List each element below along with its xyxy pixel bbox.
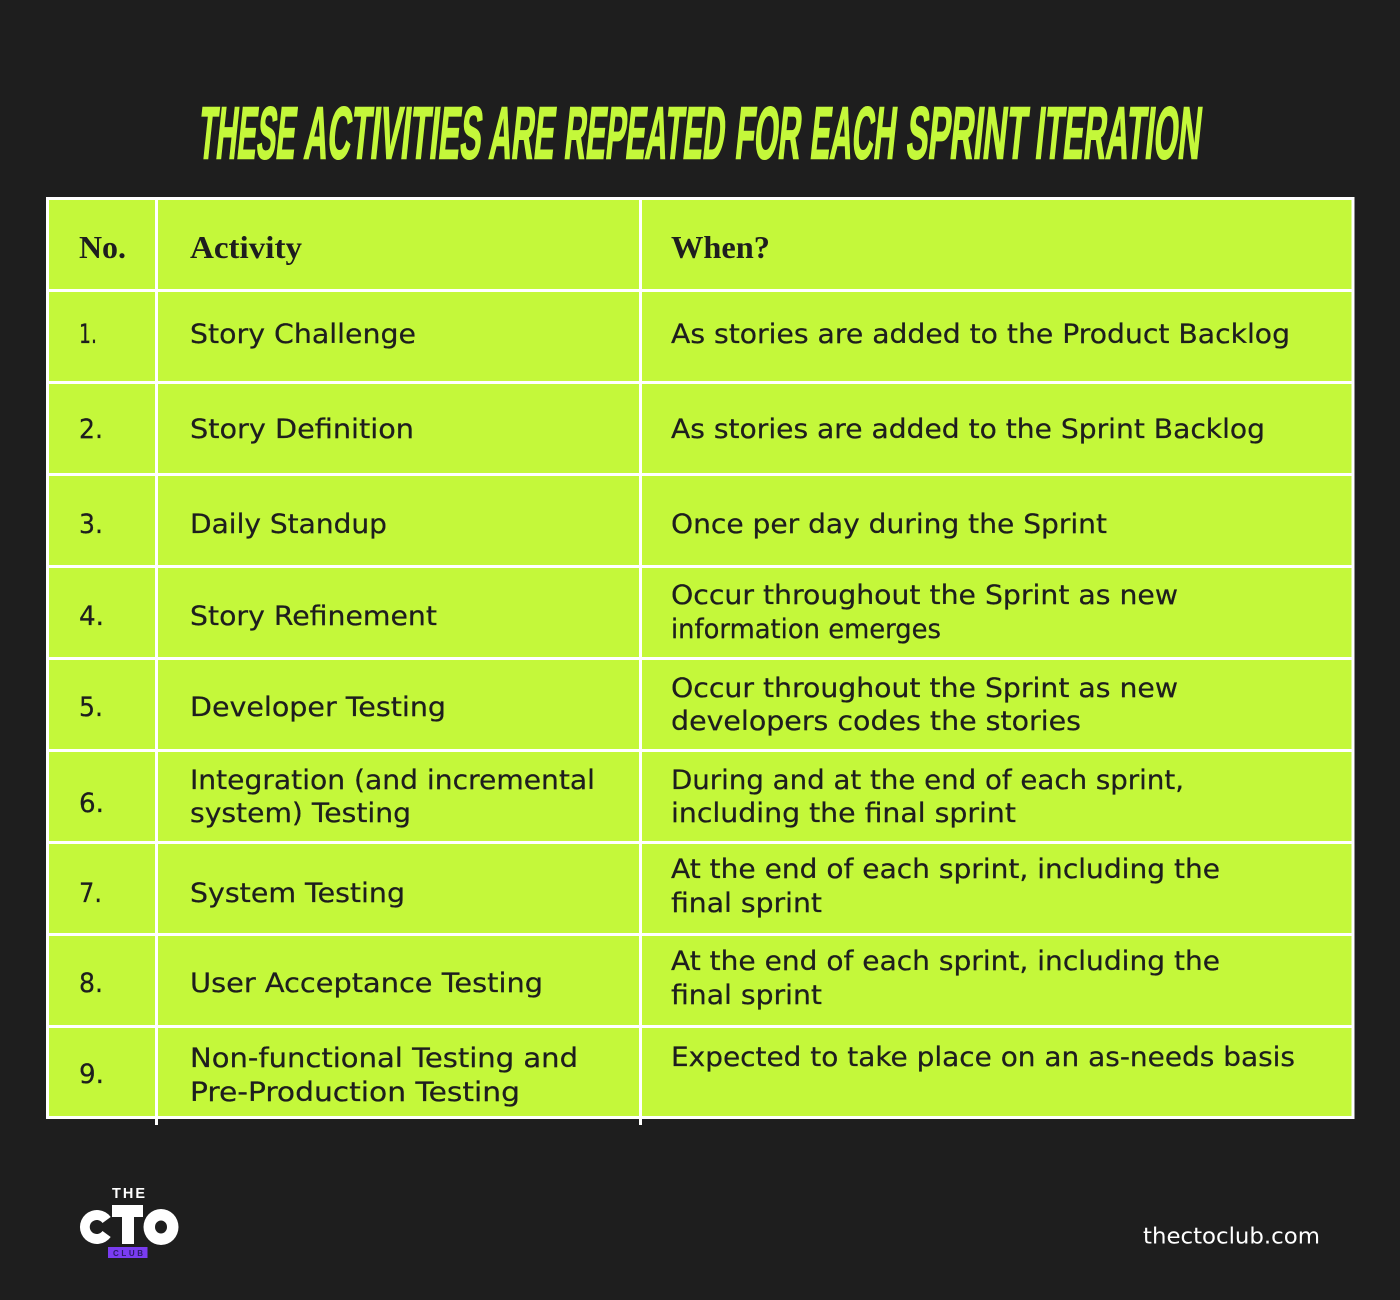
row 7 xyxy=(79,854,1220,919)
row 8: 8. xyxy=(79,968,103,999)
table background xyxy=(48,198,1353,1118)
row 7: 7. xyxy=(79,878,102,909)
title: THESE xyxy=(195,92,301,174)
title: ARE xyxy=(486,92,560,174)
row 3 xyxy=(79,509,1107,540)
row 6: 6. xyxy=(79,788,104,819)
row 5: Developer Testing xyxy=(190,692,446,723)
header row: No. xyxy=(79,229,126,265)
logo club badge xyxy=(108,1247,148,1258)
row 4: information emerges xyxy=(671,614,941,645)
title xyxy=(195,92,1206,174)
row 6: system) Testing xyxy=(190,798,411,829)
row 7: System Testing xyxy=(190,878,405,909)
header row: When? xyxy=(671,229,770,265)
row 5: 5. xyxy=(79,692,103,723)
title: FOR xyxy=(732,92,806,174)
logo letter C xyxy=(80,1210,111,1244)
row 8 xyxy=(79,946,1220,1011)
row 4: Story Refinement xyxy=(190,601,437,632)
logo letter T xyxy=(112,1205,143,1244)
row 1: Story Challenge xyxy=(190,319,416,350)
row 6: During and at the end of each sprint, xyxy=(671,765,1184,796)
row 4: 4. xyxy=(79,601,104,632)
title: ACTIVITIES xyxy=(301,92,487,174)
logo: The CTO Club: THE xyxy=(112,1186,145,1202)
row 5: Occur throughout the Sprint as new xyxy=(671,673,1178,704)
row 9 xyxy=(79,1042,1295,1108)
title: REPEATED xyxy=(561,92,730,174)
row 7: final sprint xyxy=(671,888,822,919)
row 2: 2. xyxy=(79,414,103,445)
row 8: final sprint xyxy=(671,980,822,1011)
row 4: Occur throughout the Sprint as new xyxy=(671,580,1178,611)
row 6: including the final sprint xyxy=(671,798,1016,829)
row 7: At the end of each sprint, including the xyxy=(671,854,1220,885)
row 1 xyxy=(79,319,1290,350)
row 1: As stories are added to the Product Backlog xyxy=(671,319,1290,350)
row 6: Integration (and incremental xyxy=(190,765,595,796)
row 4 xyxy=(79,580,1178,645)
row 3: 3. xyxy=(79,509,103,540)
header row: Activity xyxy=(190,229,302,265)
row 9: Expected to take place on an as-needs basis xyxy=(671,1042,1295,1073)
table xyxy=(47,198,1353,1125)
row 8: User Acceptance Testing xyxy=(190,968,543,999)
logo letter O xyxy=(144,1209,178,1245)
website url: thectoclub.com xyxy=(1143,1224,1320,1250)
title: SPRINT xyxy=(903,92,1032,174)
row 3: Once per day during the Sprint xyxy=(671,509,1107,540)
row 3: Daily Standup xyxy=(190,509,387,540)
row 9: Non-functional Testing and xyxy=(190,1043,578,1074)
logo: The CTO Club xyxy=(80,1186,178,1258)
row 9: 9. xyxy=(79,1059,104,1090)
header row xyxy=(79,229,770,265)
row 8: At the end of each sprint, including the xyxy=(671,946,1220,977)
logo: The CTO Club: CLUB xyxy=(113,1249,143,1258)
row 9: Pre-Production Testing xyxy=(190,1077,520,1108)
row 1: 1. xyxy=(79,319,97,350)
row 5 xyxy=(79,673,1178,737)
row 2: As stories are added to the Sprint Backlog xyxy=(671,414,1265,445)
row 6 xyxy=(79,765,1184,829)
title: EACH xyxy=(807,92,901,174)
row 2: Story Definition xyxy=(190,414,414,445)
row 5: developers codes the stories xyxy=(671,706,1081,737)
row 2 xyxy=(79,414,1265,445)
